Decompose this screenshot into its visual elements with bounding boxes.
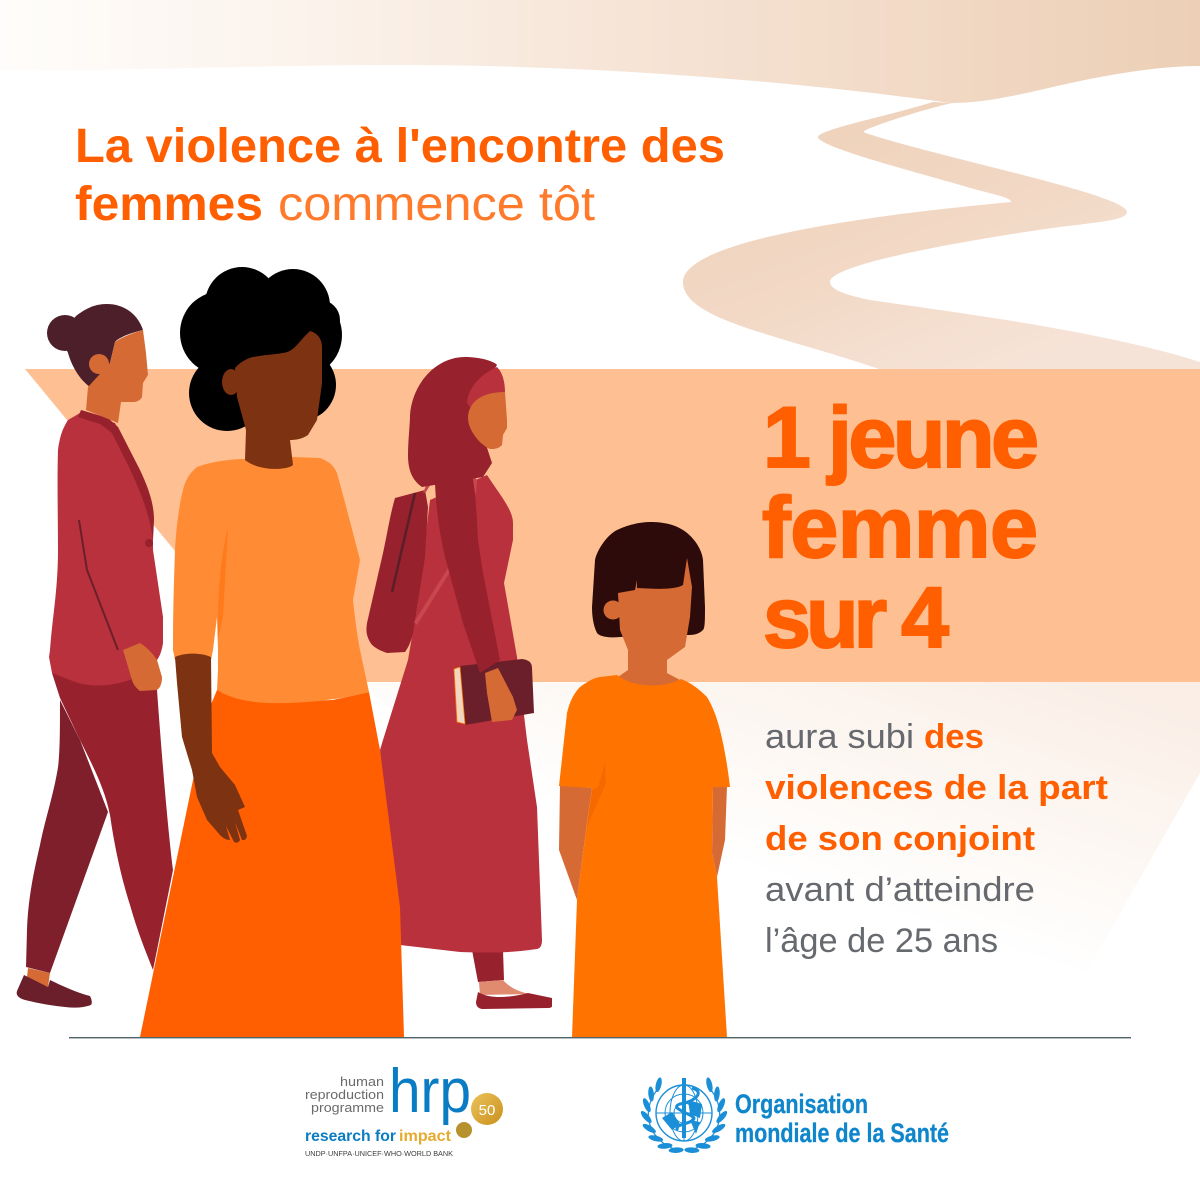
title: femmes	[75, 178, 263, 231]
hand	[123, 643, 162, 691]
logo: HRP	[305, 1057, 503, 1158]
face and neck	[86, 330, 148, 423]
jacket lapel	[78, 410, 154, 540]
jacket button	[145, 539, 153, 547]
globe	[656, 1085, 712, 1141]
hood inner band	[467, 367, 505, 420]
figure: woman with bun in red jacket	[17, 304, 173, 1008]
staff	[682, 1078, 686, 1138]
ear	[222, 369, 240, 395]
left arm	[559, 785, 592, 900]
wordmark small: programme	[311, 1100, 384, 1115]
shoe	[476, 992, 552, 1009]
headline stat	[762, 390, 1039, 666]
book	[460, 659, 534, 725]
title: La violence à l'encontre des	[75, 120, 725, 173]
headline stat: sur 4	[763, 570, 949, 666]
foot	[479, 980, 530, 995]
logo: HRP: impact	[399, 1128, 452, 1145]
figure: woman with afro in orange	[140, 267, 404, 1037]
body text: des	[924, 718, 984, 756]
headline stat: 1 jeune	[763, 390, 1039, 486]
footer divider	[69, 1037, 1131, 1038]
skirt	[140, 690, 404, 1037]
back leg	[26, 700, 108, 973]
neck and face	[235, 331, 322, 469]
body text: aura subi	[765, 718, 914, 756]
continents	[662, 1100, 702, 1134]
dress	[559, 675, 730, 1037]
headline stat: femme	[762, 480, 1038, 576]
body text: de son conjoint	[765, 820, 1035, 858]
sweater	[173, 457, 369, 703]
ear	[89, 354, 109, 374]
arm	[435, 466, 500, 673]
wordmark small	[305, 1074, 384, 1115]
book pages	[454, 667, 465, 724]
title	[75, 120, 725, 231]
background: faded panel under banner	[360, 682, 1200, 985]
wordmark small: reproduction	[305, 1087, 384, 1102]
face	[468, 392, 507, 449]
backpack	[366, 490, 428, 653]
jacket	[49, 413, 163, 686]
sweater crease	[218, 527, 228, 640]
wordmark small: human	[340, 1074, 384, 1089]
background: winding road	[683, 102, 1200, 369]
figure: woman in hijab with backpack and book	[366, 357, 552, 1009]
body text: l’âge de 25 ans	[765, 922, 998, 960]
backpack strap	[423, 463, 477, 495]
hood	[408, 357, 497, 487]
hand	[485, 668, 517, 722]
body text: avant d’atteindre	[765, 871, 1035, 909]
backpack zipper	[392, 493, 415, 592]
front leg	[52, 670, 173, 970]
afro hair	[180, 267, 342, 431]
right arm	[712, 786, 727, 877]
dress	[380, 475, 542, 953]
laurel stems	[648, 1090, 720, 1151]
gold dot	[456, 1122, 472, 1138]
hair	[592, 522, 705, 637]
body text	[765, 718, 1108, 960]
logo: WHO name: Organisation	[735, 1089, 868, 1119]
partners: UNDP·UNFPA·UNICEF·WHO·WORLD BANK	[305, 1149, 453, 1158]
body text: violences de la part	[765, 769, 1108, 807]
shoe	[17, 975, 92, 1008]
figure: girl in orange dress	[559, 522, 730, 1037]
logo: WHO name	[735, 1089, 949, 1148]
sleeve seam	[79, 520, 118, 650]
hair	[47, 315, 83, 351]
wordmark hrp: hrp	[389, 1057, 471, 1126]
arm and hand	[175, 654, 247, 843]
background: top sand band	[0, 0, 1200, 103]
ankle	[27, 968, 50, 987]
serpent	[677, 1088, 698, 1130]
logo: HRP: 50	[479, 1102, 495, 1119]
tagline: research for	[305, 1128, 396, 1145]
logo: WHO emblem	[639, 1077, 729, 1153]
laurel leaves	[639, 1077, 729, 1153]
background: orange banner	[25, 369, 1200, 682]
face and neck	[618, 558, 692, 687]
leg	[472, 950, 504, 982]
ear	[604, 600, 622, 620]
title: commence tôt	[278, 178, 595, 231]
logo: WHO name: mondiale de la Santé	[735, 1118, 949, 1148]
dress crease	[587, 762, 606, 827]
gold 50 badge	[471, 1093, 503, 1125]
